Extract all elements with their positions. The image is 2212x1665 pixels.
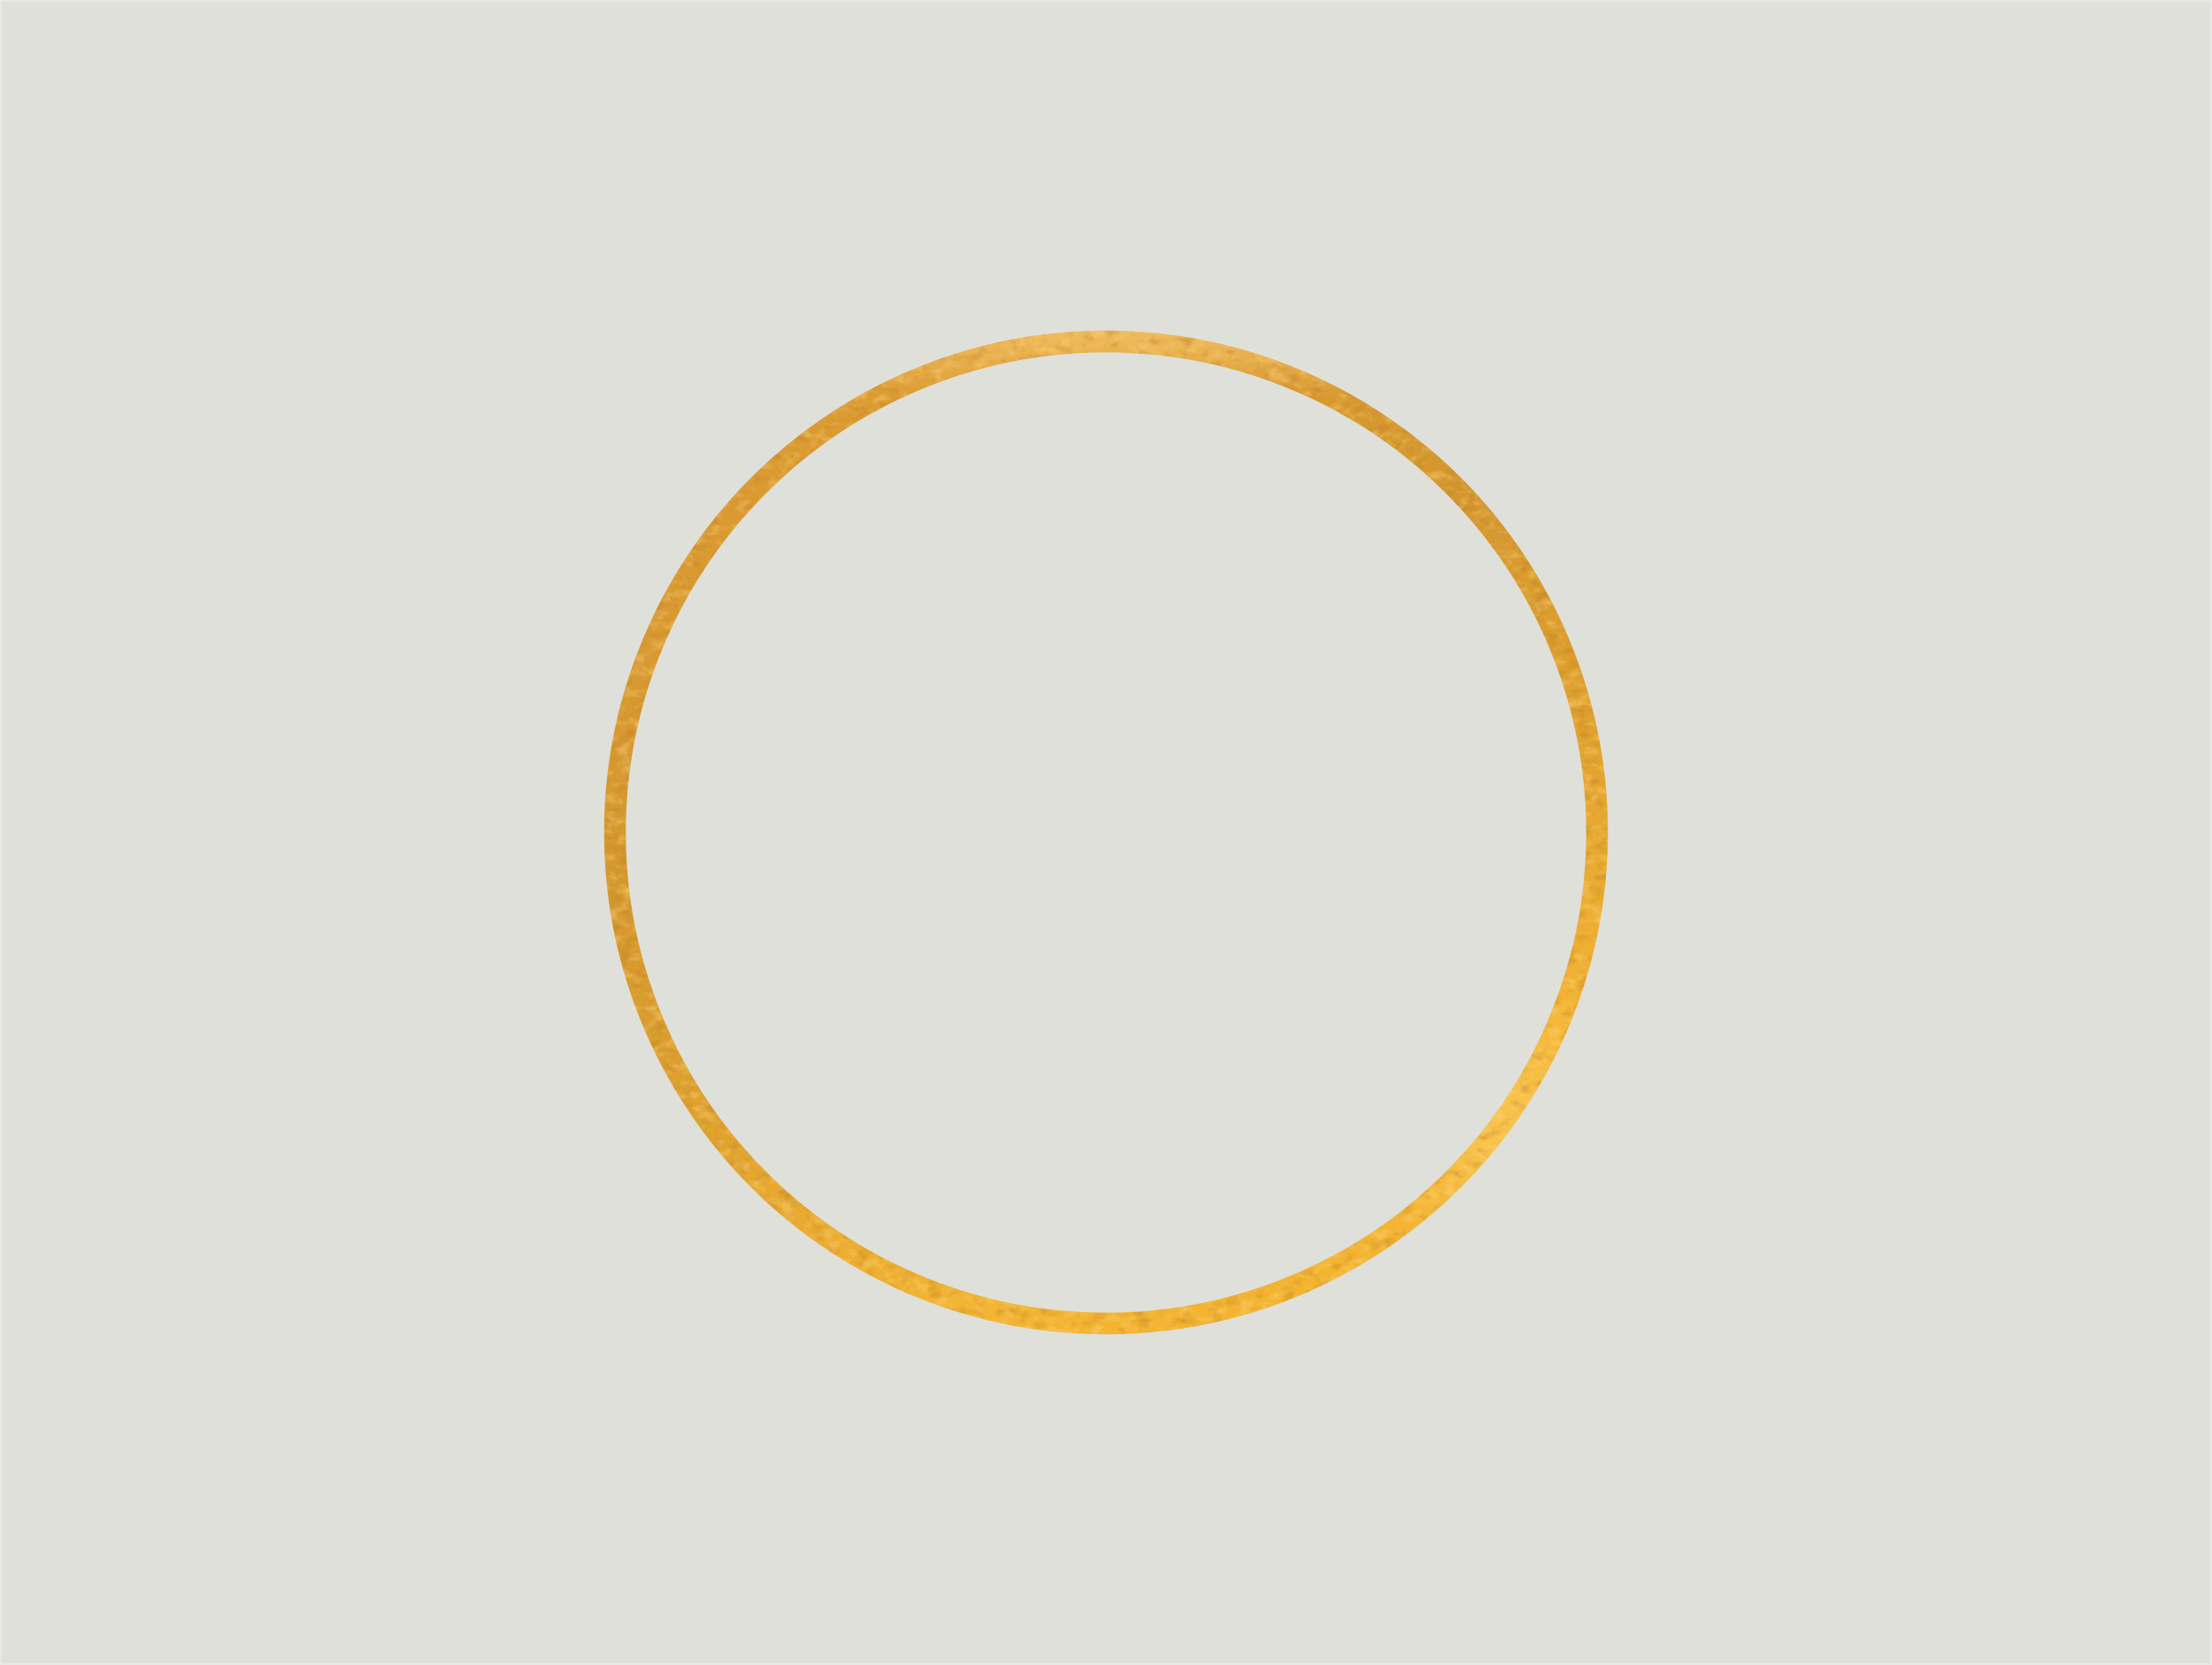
gold foil ring	[615, 341, 1597, 1324]
